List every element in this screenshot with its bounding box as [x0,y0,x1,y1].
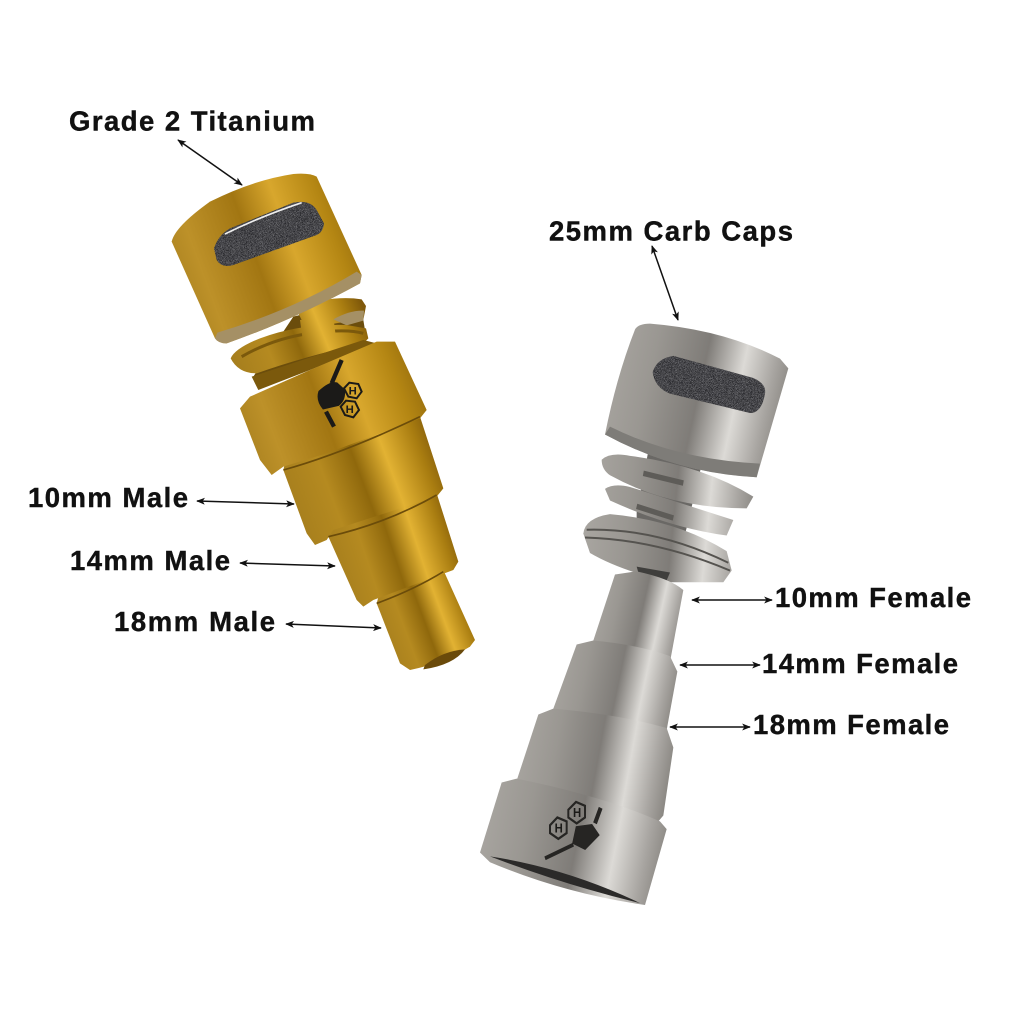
gold titanium nail [172,174,475,670]
gold section 10mm [283,393,443,545]
label: 25mm Carb Caps: 25mm Carb Caps [549,216,793,246]
label: 14mm Female: 14mm Female [762,648,958,679]
silver section 10mm [593,571,683,679]
silver titanium nail [480,324,788,905]
silver fin shading [637,473,683,518]
logo letter lower: H [555,821,563,836]
gold cap [172,174,362,343]
arrow: 18mm Female [670,726,750,728]
gold section 14mm [328,477,458,607]
gold cap bevel [215,272,362,343]
silver lower fin [605,485,733,536]
silver section 14mm [553,641,677,749]
label: 10mm Male: 10mm Male [28,482,188,513]
silver base [480,779,667,905]
gold cap slot [214,202,324,266]
silver cap underside [605,427,760,477]
silver cap [605,324,788,477]
label: 18mm Female: 18mm Female [753,709,949,740]
arrow: 14mm Female [680,664,760,666]
label: 10mm Female: 10mm Female [775,582,971,613]
gold neck centre [300,317,337,357]
silver neck [637,442,703,578]
silver neck joint [637,567,670,580]
arrow: 18mm Male [286,624,381,628]
logo letter lower: H [346,404,354,416]
arrow: 10mm Male [197,501,294,504]
silver washer [583,514,732,582]
logo letter upper: H [349,386,357,398]
gold collar [252,340,377,390]
gold lower fin groove [242,331,363,357]
gold upper fin [295,298,366,330]
gold slot highlight [225,203,302,234]
gold neck [253,300,367,387]
silver cap slot [653,356,765,413]
arrow: 25mm Carb Caps [652,246,678,320]
label: Grade 2 Titanium: Grade 2 Titanium [69,106,315,136]
gold section joints [283,417,443,603]
silver section 18mm [517,709,673,831]
silver logo [545,802,601,858]
gold top section [240,342,427,475]
logo letter upper: H [573,805,581,820]
silver washer threads [585,530,730,571]
label: 14mm Male: 14mm Male [70,545,230,576]
silver upper fin [602,455,753,508]
label: 18mm Male: 18mm Male [114,606,275,637]
gold tip opening [423,649,465,669]
gold logo [319,360,362,427]
gold tip section 18mm [377,543,475,670]
silver base opening [490,856,640,903]
arrow: Grade 2 Titanium [178,140,242,185]
arrow: 10mm Female [692,599,772,601]
gold upper fin underside [333,311,364,325]
gold lower fin [231,325,368,373]
arrow: 14mm Male [240,563,335,566]
